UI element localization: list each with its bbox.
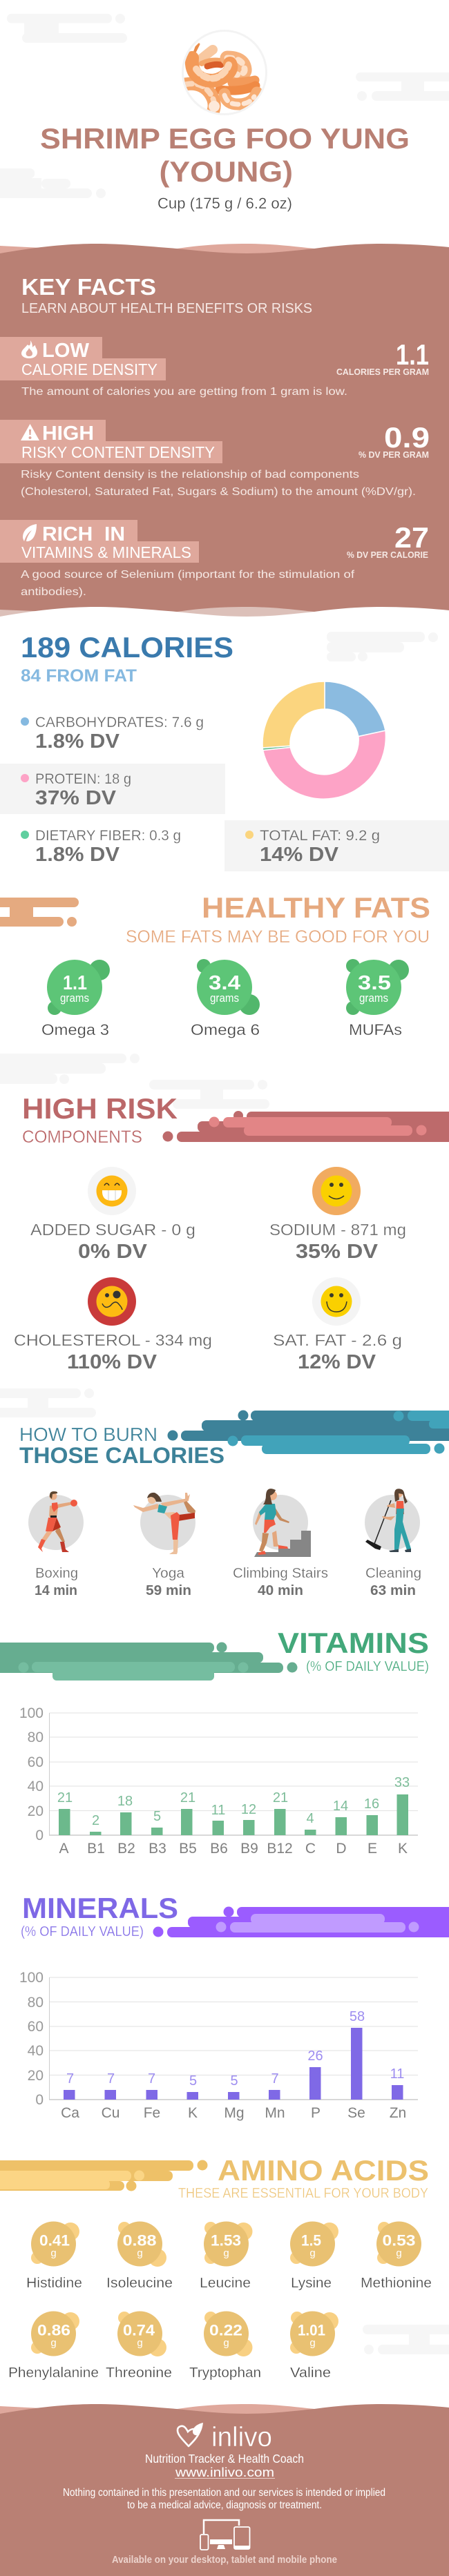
bar chart: vitamins: C (305, 1841, 316, 1857)
item: saturated fat: 12% DV (298, 1351, 376, 1373)
fact: rich in vitamins and minerals: VITAMINS & MINERALS (21, 543, 191, 561)
bar chart: vitamins: 100 (19, 1705, 44, 1721)
heading: amino acids: AMINO ACIDS (218, 2154, 429, 2187)
bar chart: vitamins: 5 (153, 1809, 161, 1824)
activity: boxing: Boxing (35, 1566, 78, 1581)
fact: high risky content density (0, 420, 430, 498)
bar chart: minerals: Fe (144, 2105, 160, 2121)
heading: healthy fats: SOME FATS MAY BE GOOD FOR YOU (126, 927, 430, 947)
decorative blob: healthy fats (0, 898, 79, 927)
activity: boxing: 14 min (35, 1583, 77, 1598)
badge: threonine: Threonine (106, 2365, 172, 2381)
title: SHRIMP EGG FOO YUNG (40, 122, 410, 155)
badge: leucine (200, 2222, 253, 2291)
fact: low calorie density (0, 337, 429, 398)
icon: smiling emoji (321, 1175, 352, 1207)
badge: tryptophan: g (223, 2337, 229, 2349)
fact: rich in vitamins and minerals: % DV PER CALORIE (347, 550, 428, 560)
bar chart: minerals: Mn (265, 2105, 285, 2121)
fact: high risky content density: RISKY CONTENT DENSITY (21, 443, 215, 461)
badge: omega 3 (41, 960, 110, 1038)
heading: minerals: (% OF DAILY VALUE) (21, 1924, 144, 1939)
bar chart: minerals: 100 (19, 1970, 44, 1986)
badge: phenylalanine: 0.86 (37, 2321, 70, 2339)
badge: mufas (346, 959, 409, 1038)
badge: phenylalanine: Phenylalanine (8, 2365, 99, 2381)
icon: desktop, tablet and phone (200, 2520, 250, 2550)
activity: boxing (28, 1491, 84, 1598)
disclaimer: Nothing contained in this presentation and our services is intended or implied (63, 2487, 385, 2499)
bar chart: minerals: 5 (230, 2073, 238, 2089)
bar chart: minerals: 11 (390, 2066, 404, 2082)
bar chart: vitamins: B9 (240, 1841, 258, 1857)
icon: grinning emoji (97, 1175, 127, 1207)
legend: carbohydrates: CARBOHYDRATES: 7.6 g (35, 714, 204, 730)
badge: valine: g (309, 2337, 316, 2349)
fact: low calorie density: CALORIES PER GRAM (336, 367, 429, 377)
bar chart: vitamins: B12 (267, 1841, 293, 1857)
badge: lysine: Lysine (291, 2276, 332, 2291)
bar chart: vitamins: 80 (28, 1730, 44, 1745)
badge: lysine (290, 2222, 338, 2291)
badge: threonine: 0.74 (123, 2321, 155, 2339)
decorative blob: high risk (163, 1111, 449, 1142)
heading: healthy fats: HEALTHY FATS (202, 891, 430, 924)
badge: valine: 1.01 (298, 2321, 325, 2339)
bar chart: vitamins: 60 (28, 1754, 44, 1770)
badge: methionine: g (396, 2247, 402, 2259)
bar chart: vitamins (19, 1705, 418, 1857)
panel: key facts (0, 244, 449, 620)
heading: amino acids (178, 2154, 429, 2201)
bar chart: vitamins: 21 (180, 1790, 195, 1805)
item: cholesterol: 110% DV (67, 1351, 157, 1373)
bar chart: minerals: K (188, 2105, 198, 2121)
icon: person sweeping (365, 1489, 411, 1552)
heading: how to burn: HOW TO BURN (19, 1424, 157, 1445)
icon: yoga pose (133, 1493, 195, 1554)
bar chart: vitamins: B3 (149, 1841, 166, 1857)
bar chart: vitamins: A (59, 1841, 69, 1857)
badge: omega 6: Omega 6 (191, 1021, 260, 1038)
legend: dietary fiber: DIETARY FIBER: 0.3 g (35, 827, 181, 844)
bar chart: vitamins: B5 (179, 1841, 197, 1857)
item: sodium: SODIUM - 871 mg (269, 1221, 406, 1239)
fact: high risky content density: % DV PER GRAM (359, 449, 429, 460)
activity: climbing stairs: Climbing Stairs (233, 1566, 328, 1581)
badge: threonine: g (137, 2337, 143, 2349)
item: cholesterol (14, 1277, 212, 1373)
title: (YOUNG) (159, 155, 293, 188)
activity: yoga: 59 min (146, 1583, 191, 1598)
decorative blob: vitamins (0, 1642, 297, 1681)
bar chart: minerals: 7 (271, 2071, 279, 2086)
fact: low calorie density: The amount of calories you are getting from 1 gram is low. (21, 386, 347, 398)
bar chart: minerals: 20 (28, 2068, 44, 2084)
badge: isoleucine: 0.88 (123, 2231, 156, 2249)
legend: total fat: 14% DV (260, 844, 339, 866)
badge: histidine (26, 2222, 82, 2291)
fact: rich in vitamins and minerals (0, 520, 429, 598)
bar chart: minerals: 80 (28, 1995, 44, 2011)
bar chart: vitamins: D (336, 1841, 347, 1857)
heading: how to burn: THOSE CALORIES (19, 1443, 224, 1468)
heading: key facts: KEY FACTS (21, 274, 156, 300)
fact: low calorie density: 1.1 (396, 338, 429, 371)
bar chart: vitamins: B6 (210, 1841, 228, 1857)
badge: threonine (106, 2312, 172, 2381)
fact: rich in vitamins and minerals: antibodies). (21, 586, 86, 598)
badge: methionine: 0.53 (383, 2231, 416, 2249)
icon: warning triangle (21, 424, 39, 440)
legend: dietary fiber (21, 827, 181, 866)
bar chart: minerals: 7 (148, 2071, 155, 2086)
panel: minerals (19, 1892, 449, 2121)
bar chart: minerals: 7 (66, 2071, 74, 2086)
heading: healthy fats (126, 891, 430, 947)
badge: tryptophan: 0.22 (209, 2321, 242, 2339)
bar chart: minerals: P (311, 2105, 321, 2121)
bar chart: minerals: 40 (28, 2043, 44, 2059)
bar chart: vitamins: 20 (28, 1803, 44, 1819)
icon: happy emoji (321, 1286, 352, 1317)
heading: high risk (22, 1092, 178, 1147)
logo: inlivo: inlivo (211, 2422, 272, 2452)
legend: total fat (245, 827, 380, 866)
bar chart: minerals: 5 (189, 2073, 197, 2089)
bar chart: vitamins: 2 (92, 1813, 99, 1828)
bar chart: minerals: 60 (28, 2019, 44, 2035)
serving size: Cup (175 g / 6.2 oz) (157, 195, 292, 212)
bar chart: minerals (19, 1970, 418, 2121)
panel: healthy fats (0, 891, 430, 1038)
panel: how to burn those calories (19, 1410, 449, 1598)
bar chart: vitamins: 16 (364, 1797, 379, 1812)
panel: footer (0, 2404, 449, 2576)
panel: amino acids (0, 2154, 432, 2381)
fact: rich in vitamins and minerals: A good source of Selenium (important for the stimulation of (21, 569, 355, 581)
legend: carbohydrates: 1.8% DV (35, 730, 120, 753)
bar chart: vitamins: 18 (117, 1794, 133, 1809)
bar chart: minerals: 26 (307, 2049, 323, 2064)
bar chart: vitamins: 21 (273, 1790, 288, 1805)
donut chart: calorie breakdown (262, 681, 385, 799)
icon: woman climbing stairs (254, 1489, 311, 1557)
item: saturated fat: SAT. FAT - 2.6 g (273, 1331, 402, 1349)
decorative blob: burn (167, 1410, 449, 1454)
heading: calories: 84 FROM FAT (21, 666, 137, 686)
heading: vitamins (278, 1627, 429, 1674)
icon: leaf (23, 524, 37, 541)
item: saturated fat (273, 1277, 402, 1373)
bar chart: vitamins: 0 (35, 1828, 44, 1843)
heading: amino acids: THESE ARE ESSENTIAL FOR YOUR BODY (178, 2186, 428, 2201)
badge: lysine: 1.5 (301, 2231, 321, 2249)
legend: protein: 37% DV (35, 787, 117, 809)
bar chart: vitamins: 21 (57, 1790, 73, 1805)
bar chart: vitamins: 14 (333, 1799, 348, 1814)
badge: omega 3: 1.1 (63, 972, 87, 994)
badge: tryptophan: Tryptophan (189, 2365, 261, 2381)
bar chart: minerals: Zn (390, 2105, 406, 2121)
bar chart: vitamins: E (367, 1841, 377, 1857)
activity: yoga (133, 1493, 195, 1598)
disclaimer: to be a medical advice, diagnosis or treatment. (127, 2499, 322, 2511)
decorative blob: amino acids (0, 2160, 207, 2191)
disclaimer (63, 2487, 385, 2511)
panel: vitamins (0, 1627, 429, 1857)
item: added sugar: ADDED SUGAR - 0 g (30, 1221, 195, 1239)
badge: tryptophan (189, 2312, 261, 2381)
badge: isoleucine (106, 2222, 173, 2291)
legend: dietary fiber: 1.8% DV (35, 844, 120, 866)
heading: minerals: MINERALS (22, 1892, 178, 1924)
heading: key facts (21, 274, 312, 316)
badge: omega 6: 3.4 (209, 972, 240, 994)
legend: carbohydrates (21, 714, 204, 753)
badge: omega 6: grams (210, 991, 239, 1005)
fact: rich in vitamins and minerals: 27 (394, 521, 429, 554)
item: sodium: 35% DV (296, 1241, 379, 1263)
badge: lysine: g (309, 2247, 316, 2259)
heading: minerals (21, 1892, 178, 1939)
legend: protein: PROTEIN: 18 g (35, 771, 131, 787)
badge: methionine: Methionine (361, 2276, 432, 2291)
item: cholesterol: CHOLESTEROL - 334 mg (14, 1331, 212, 1349)
bar chart: vitamins: 4 (306, 1811, 314, 1826)
activity: climbing stairs: 40 min (258, 1583, 303, 1598)
activity: climbing stairs (233, 1489, 328, 1598)
activity: cleaning: Cleaning (365, 1566, 421, 1581)
heading: calories (21, 631, 233, 686)
bar chart: minerals: Mg (224, 2105, 245, 2121)
fact: high risky content density: 0.9 (384, 421, 430, 454)
badge: isoleucine: Isoleucine (106, 2276, 173, 2291)
heading: calories: 189 CALORIES (21, 631, 233, 664)
badge: omega 3: grams (60, 991, 89, 1005)
badge: histidine: g (50, 2247, 57, 2259)
heading: high risk: HIGH RISK (22, 1092, 178, 1125)
website link: www.inlivo.com (175, 2466, 274, 2479)
badge: leucine: 1.53 (211, 2231, 241, 2249)
panel: high risk components (14, 1092, 449, 1373)
tagline: Nutrition Tracker & Health Coach (145, 2452, 304, 2466)
heading: vitamins: (% OF DAILY VALUE) (306, 1659, 429, 1674)
heading: how to burn (19, 1424, 224, 1468)
heading: high risk: COMPONENTS (22, 1127, 142, 1147)
bar chart: vitamins: 12 (241, 1802, 256, 1817)
icon: boxer (38, 1491, 77, 1552)
icon: worried emoji (97, 1286, 127, 1317)
badge: omega 3: Omega 3 (41, 1021, 109, 1038)
fact: rich in vitamins and minerals: RICH IN (42, 523, 125, 545)
bar chart: minerals: 58 (350, 2009, 365, 2024)
fact: high risky content density: (Cholesterol, Saturated Fat, Sugars & Sodium) to the amount (%DV/gr). (21, 486, 416, 498)
heading: vitamins: VITAMINS (278, 1627, 429, 1659)
icon: shrimp photo in circle (182, 30, 267, 115)
icon: flame (21, 340, 37, 358)
item: sodium (269, 1167, 406, 1263)
legend: total fat: TOTAL FAT: 9.2 g (260, 827, 380, 844)
bar chart: vitamins: B1 (87, 1841, 105, 1857)
bar chart: vitamins: 11 (211, 1803, 225, 1818)
badge: histidine: 0.41 (39, 2231, 70, 2249)
fact: low calorie density: LOW (42, 340, 90, 362)
badge: isoleucine: g (137, 2247, 143, 2259)
item: added sugar: 0% DV (78, 1241, 148, 1263)
badge: valine: Valine (290, 2365, 331, 2381)
bar chart: minerals: Se (347, 2105, 365, 2121)
legend: protein (21, 771, 131, 809)
fact: low calorie density: CALORIE DENSITY (21, 360, 157, 378)
header: food photo, title and serving (40, 30, 410, 212)
availability note: Available on your desktop, tablet and mobile phone (112, 2555, 337, 2566)
bar chart: minerals: 7 (107, 2071, 115, 2086)
heading: key facts: LEARN ABOUT HEALTH BENEFITS OR RISKS (21, 301, 312, 316)
badge: valine (290, 2312, 338, 2381)
bar chart: minerals: Cu (102, 2105, 120, 2121)
bar chart: minerals: 0 (35, 2092, 44, 2108)
bar chart: vitamins: 40 (28, 1779, 44, 1794)
logo: inlivo (178, 2422, 272, 2452)
activity: cleaning (365, 1489, 421, 1598)
activity: cleaning: 63 min (370, 1583, 416, 1598)
badge: leucine: g (223, 2247, 229, 2259)
fact: high risky content density: Risky Content density is the relationship of bad components (21, 469, 359, 481)
badge: histidine: Histidine (26, 2276, 82, 2291)
activity: yoga: Yoga (152, 1566, 185, 1581)
item: added sugar (30, 1167, 195, 1263)
bar chart: vitamins: B2 (117, 1841, 135, 1857)
bar chart: vitamins: K (398, 1841, 408, 1857)
badge: mufas: 3.5 (358, 972, 391, 994)
fact: high risky content density: HIGH (42, 423, 94, 445)
badge: omega 6 (191, 959, 260, 1038)
badge: leucine: Leucine (200, 2276, 251, 2291)
title (40, 122, 410, 188)
panel: calories (0, 631, 449, 871)
bar chart: minerals: Ca (61, 2105, 79, 2121)
badge: mufas: grams (359, 991, 388, 1005)
badge: mufas: MUFAs (349, 1021, 402, 1038)
badge: phenylalanine (8, 2312, 99, 2381)
bar chart: vitamins: 33 (394, 1775, 410, 1790)
badge: methionine (361, 2222, 432, 2291)
badge: phenylalanine: g (50, 2337, 57, 2349)
decorative blob: minerals (153, 1907, 449, 1937)
